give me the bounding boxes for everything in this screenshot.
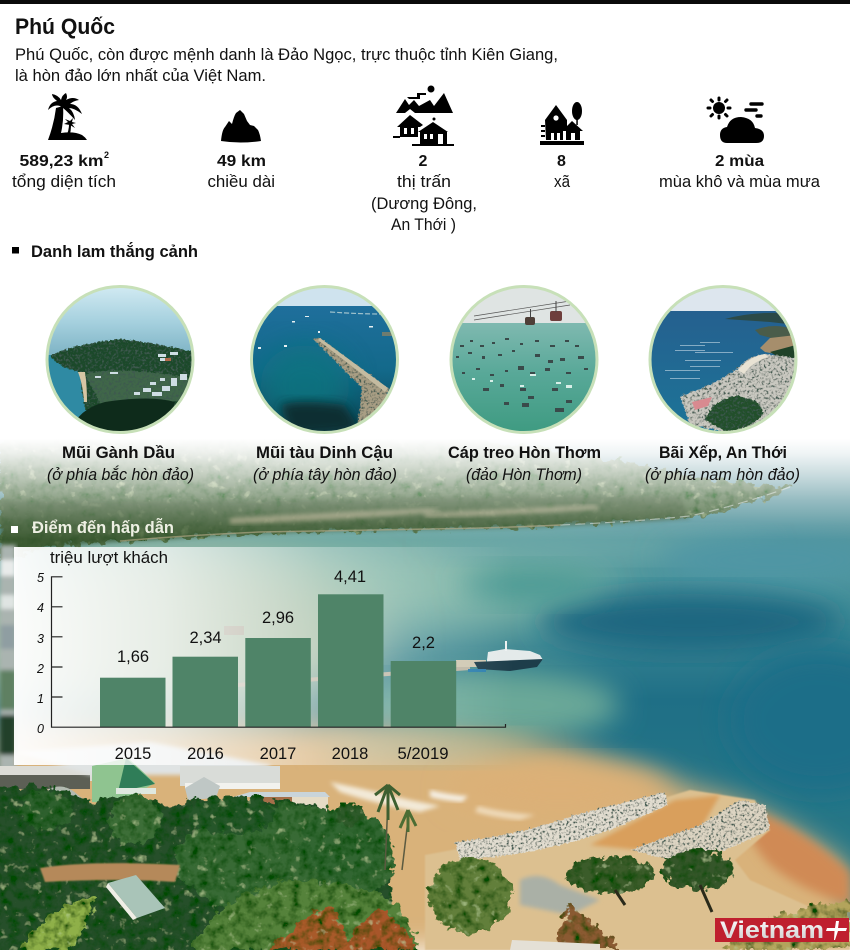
pier and ship bbox=[224, 626, 543, 685]
intro text: là hòn đảo lớn nhất của Việt Nam. bbox=[15, 66, 266, 85]
icon: mountain bbox=[221, 110, 261, 142]
value labels bbox=[117, 568, 435, 666]
title: Phú Quốc bbox=[15, 14, 115, 39]
value: 2 bbox=[419, 153, 428, 170]
stat: length bbox=[208, 110, 275, 191]
stat: seasons bbox=[659, 98, 821, 191]
value: 49 km bbox=[217, 153, 266, 170]
white fade over the photo top bbox=[0, 395, 850, 540]
icon: town and mountains bbox=[393, 86, 454, 146]
value labels: 1,66 bbox=[117, 648, 149, 666]
value labels: 2,34 bbox=[189, 629, 222, 647]
logo: VietnamPlus: Vietnam bbox=[720, 917, 824, 944]
label: (Dương Đông, bbox=[371, 194, 477, 213]
photo circle bbox=[450, 285, 600, 436]
unit label: triệu lượt khách bbox=[50, 548, 168, 567]
location: (đảo Hòn Thơm) bbox=[466, 465, 582, 484]
bars bbox=[100, 594, 456, 727]
location: (ở phía bắc hòn đảo) bbox=[47, 465, 194, 484]
label bbox=[371, 172, 477, 234]
x axis labels: 2015 bbox=[115, 745, 151, 763]
name: Bãi Xếp, An Thới bbox=[659, 444, 787, 462]
stat: total area bbox=[12, 93, 116, 191]
x axis labels: 2016 bbox=[187, 745, 224, 763]
trees on the spit bbox=[428, 850, 850, 950]
heading: scenic spots: Danh lam thắng cảnh bbox=[31, 242, 198, 261]
x axis labels: 2017 bbox=[260, 745, 296, 763]
label: chiều dài bbox=[208, 172, 275, 191]
value labels: 4,41 bbox=[334, 568, 366, 586]
value labels: 2,96 bbox=[262, 609, 294, 627]
stat: total area: 2 bbox=[104, 150, 109, 160]
panel: Mũi Gành Dầu bbox=[46, 285, 196, 484]
value: 8 bbox=[557, 153, 566, 170]
sea bbox=[0, 430, 850, 920]
location: (ở phía tây hòn đảo) bbox=[253, 465, 397, 484]
icon: sun and cloud bbox=[708, 98, 764, 143]
logo: VietnamPlus bbox=[715, 917, 849, 944]
y axis labels bbox=[36, 571, 44, 736]
left buildings strip bbox=[0, 545, 16, 770]
panel: Bãi Xếp, An Thới bbox=[645, 285, 800, 484]
foreshore buildings bbox=[0, 742, 330, 815]
palm trees bbox=[336, 785, 416, 870]
x axis labels: 5/2019 bbox=[398, 745, 448, 763]
bar chart: visitors bbox=[36, 548, 506, 763]
forested headland bbox=[0, 430, 795, 560]
value: 589,23 km bbox=[20, 153, 104, 170]
intro text: Phú Quốc, còn được mệnh danh là Đảo Ngọc, trực thuộc tỉnh Kiên Giang, bbox=[15, 45, 558, 64]
y axis labels: 4 bbox=[37, 601, 44, 615]
intro text bbox=[15, 45, 558, 85]
x axis labels: 2018 bbox=[332, 745, 368, 763]
label: xã bbox=[554, 172, 570, 191]
stat: communes bbox=[540, 102, 584, 191]
icon: palm island bbox=[48, 93, 87, 140]
name: Cáp treo Hòn Thơm bbox=[448, 444, 601, 462]
value: 2 mùa bbox=[715, 153, 764, 170]
x axis labels bbox=[115, 745, 448, 763]
label: An Thới ) bbox=[391, 215, 456, 234]
label: mùa khô và mùa mưa bbox=[659, 172, 821, 191]
y axis labels: 5 bbox=[37, 571, 44, 585]
name: Mũi Gành Dầu bbox=[62, 444, 175, 462]
icon: houses and tree bbox=[540, 102, 584, 145]
y axis labels: 0 bbox=[37, 722, 44, 736]
y axis labels: 2 bbox=[36, 662, 44, 676]
label: thị trấn bbox=[397, 172, 451, 191]
location: (ở phía nam hòn đảo) bbox=[645, 465, 800, 484]
panel: Cáp treo Hòn Thơm bbox=[448, 285, 601, 484]
stat: towns bbox=[371, 86, 477, 234]
top black bar bbox=[0, 0, 850, 4]
chart backing panel bbox=[14, 547, 514, 765]
sandy shallows and beach bbox=[0, 725, 850, 950]
y axis labels: 1 bbox=[37, 692, 44, 706]
value labels: 2,2 bbox=[412, 634, 435, 652]
axes bbox=[52, 577, 506, 727]
rock breakwater and sand spit bbox=[425, 790, 850, 950]
heading: attractive destination: Điểm đến hấp dẫn bbox=[32, 518, 174, 537]
y axis labels: 3 bbox=[37, 632, 44, 646]
photo circle bbox=[649, 285, 799, 436]
photo circle bbox=[46, 285, 196, 435]
forest foreground bbox=[0, 787, 430, 950]
photo circle bbox=[250, 285, 400, 436]
name: Mũi tàu Dinh Cậu bbox=[256, 444, 393, 462]
label: tổng diện tích bbox=[12, 172, 116, 191]
panel: Mũi tàu Dinh Cậu bbox=[250, 285, 400, 484]
